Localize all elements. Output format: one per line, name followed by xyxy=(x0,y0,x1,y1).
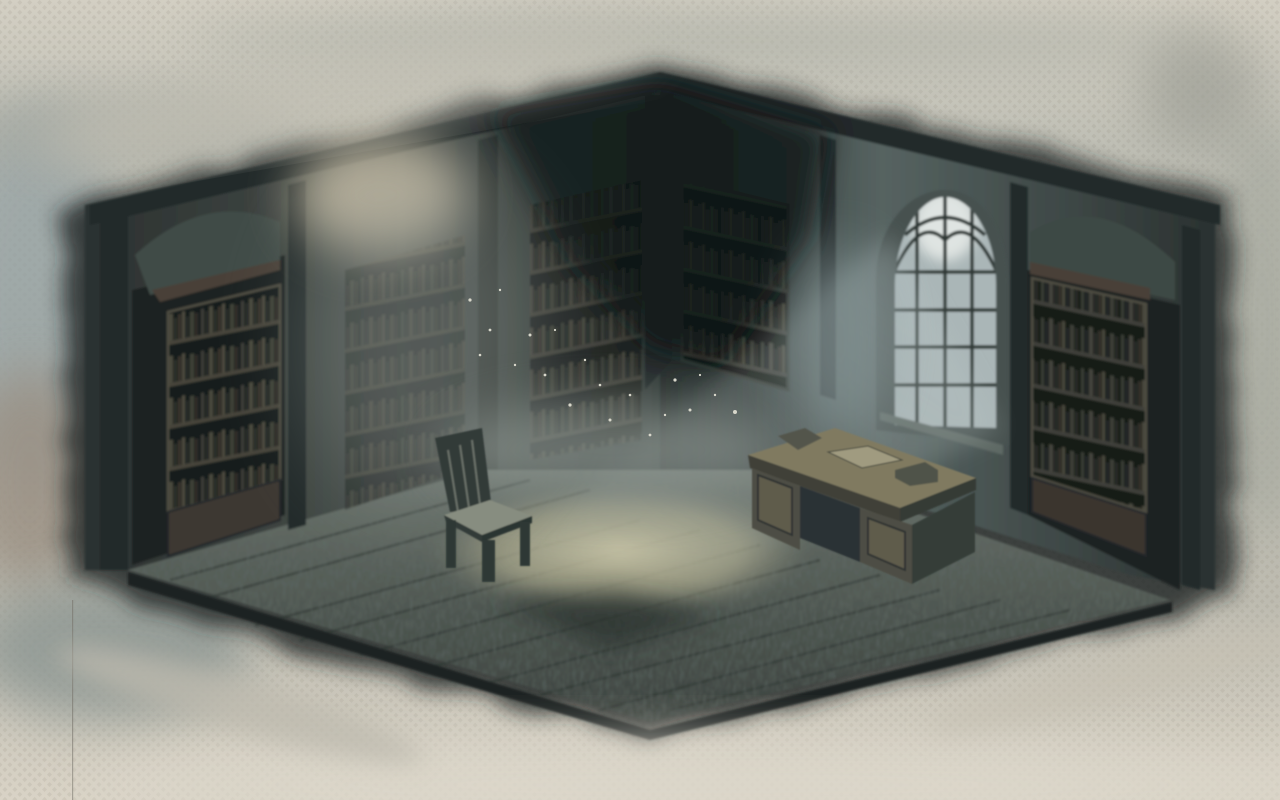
floor shadow xyxy=(490,592,720,650)
left wall xyxy=(85,75,660,570)
floor front edge xyxy=(128,572,1172,740)
floor xyxy=(128,470,1170,722)
wall pillars and beams xyxy=(90,72,1220,590)
centre left shelf xyxy=(345,235,465,510)
right wall xyxy=(660,75,1215,590)
dust particles xyxy=(468,289,737,436)
floor light patch xyxy=(430,482,810,618)
stack on desk xyxy=(778,428,822,450)
chair xyxy=(435,428,532,582)
room dark outer brush edge xyxy=(62,62,1236,738)
dark upper corner xyxy=(490,80,830,365)
light beam xyxy=(500,235,1000,570)
back corner shelf xyxy=(682,180,788,390)
floor planks xyxy=(170,480,1070,710)
window xyxy=(876,189,1008,455)
left shelf bay xyxy=(132,211,285,565)
centre shelf xyxy=(530,180,642,460)
paper on desk xyxy=(828,446,902,468)
books on desk xyxy=(895,462,938,486)
floor texture xyxy=(187,541,1124,718)
right shelf bay xyxy=(1028,217,1180,590)
fog over the left centre of the room xyxy=(295,135,890,510)
desk xyxy=(748,428,976,584)
room xyxy=(85,72,1220,740)
